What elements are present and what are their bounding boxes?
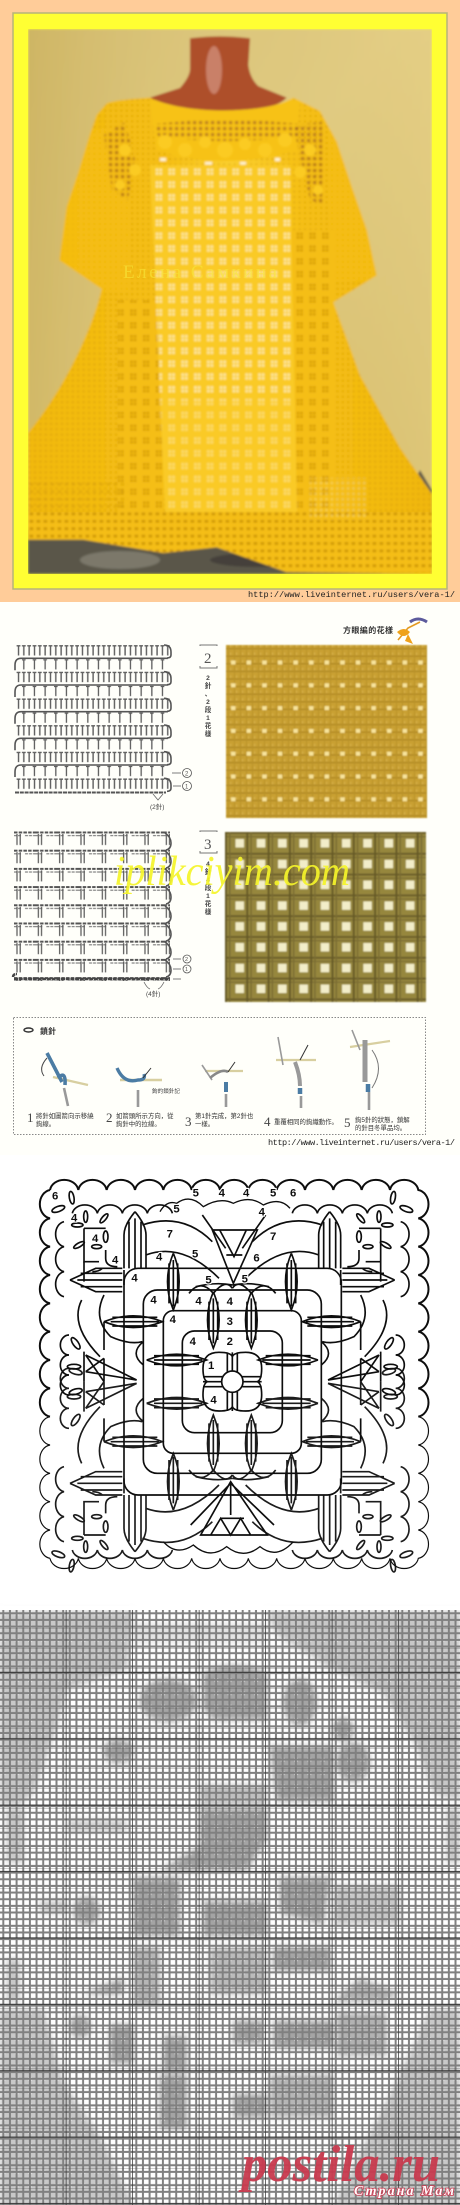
label: pattern number 2: 花 — [205, 721, 212, 730]
label: pattern number 3: 針 — [205, 867, 212, 876]
stitch count — [144, 982, 164, 998]
stitch count numbers: 2 — [227, 1336, 233, 1348]
swatch: pattern 2 — [226, 645, 427, 818]
step 4: 4 — [264, 1114, 271, 1129]
stitch count numbers: 4 — [190, 1336, 197, 1348]
stitch count numbers: 5 — [205, 1274, 212, 1286]
stitch count numbers: 5 — [173, 1203, 180, 1215]
heading with flower icon: 方眼編的花樣 — [343, 625, 393, 635]
stitch count numbers: 5 — [270, 1188, 276, 1200]
chart: pattern 2 symbols — [15, 645, 192, 811]
label: pattern number 2: 2 — [204, 651, 212, 667]
label: pattern number 3: 3 — [204, 837, 212, 853]
label: pattern number 3: 1 — [206, 893, 210, 900]
row markers: 1 — [185, 784, 189, 790]
bird and circle motif shading — [0, 1612, 460, 2205]
chart grid — [0, 1610, 460, 2205]
label: pattern number 3: 4 — [206, 877, 210, 884]
stitch count numbers: 4 — [112, 1254, 119, 1266]
row markers: 2 — [185, 772, 189, 778]
step 2: 鉤針中的拉線。 — [116, 1119, 161, 1128]
stitch count numbers: 4 — [219, 1188, 226, 1200]
stitch count numbers: 4 — [92, 1233, 99, 1245]
swatch: pattern 3 — [225, 832, 426, 1002]
panel: square motif crochet chart — [0, 1155, 460, 1610]
stitch count numbers: 4 — [210, 1394, 217, 1406]
stitch count numbers: 6 — [253, 1253, 260, 1265]
step 3: 3 — [185, 1114, 192, 1129]
step 3: 一樣。 — [195, 1119, 214, 1128]
step 5 — [344, 1030, 410, 1132]
stitch count numbers: 3 — [227, 1316, 233, 1328]
label: pattern number 2: 樣 — [205, 729, 212, 738]
label: pattern number 2: 2 — [206, 675, 210, 682]
watermark: name: Елена Самкина — [123, 262, 278, 283]
url label: http://www.liveinternet.ru/users/vera-1/ — [268, 1138, 455, 1148]
stitch count numbers: 1 — [208, 1360, 214, 1372]
stitch count: (2針) — [150, 802, 164, 811]
outer scalloped edge — [40, 1180, 429, 1569]
stitch count: (4針) — [146, 989, 160, 998]
panel: chain stitch tutorial — [14, 1018, 426, 1134]
stitch count numbers: 7 — [270, 1231, 276, 1243]
quadrants of the motif — [51, 1191, 414, 1572]
tutorial heading: 鎖針 — [40, 1026, 56, 1036]
stitch count numbers: 6 — [52, 1190, 58, 1202]
stitch count numbers: 7 — [167, 1228, 173, 1240]
stitch count numbers: 5 — [192, 1248, 198, 1260]
step 1: 1 — [27, 1110, 34, 1125]
step 1: 將針如圖箭向示移繞 — [36, 1111, 94, 1120]
label: pattern number 3 — [200, 831, 217, 916]
step 2: 鉤的鎖針記 — [152, 1087, 180, 1095]
panel: stitch patterns from the book page — [0, 602, 460, 1160]
label: pattern number 3: 樣 — [205, 907, 212, 916]
centre flower and rings — [84, 1262, 381, 1495]
step 4 — [264, 1037, 338, 1129]
top and bottom triangles — [191, 1215, 274, 1535]
stitch count numbers — [52, 1188, 296, 1406]
stitch count — [150, 794, 164, 811]
watermark: postila.ru: postila.ru — [238, 2136, 440, 2193]
label: pattern number 2: 段 — [205, 705, 212, 714]
lace yoke — [150, 100, 300, 161]
step 3 — [185, 1062, 254, 1129]
stitch count numbers: 4 — [259, 1207, 266, 1219]
label: pattern number 3: 4 — [206, 861, 210, 868]
step 2 — [106, 1068, 180, 1128]
mannequin neck — [150, 36, 287, 113]
stitch count numbers: 5 — [242, 1273, 248, 1285]
stitch count numbers: 4 — [195, 1296, 202, 1308]
stitch count numbers: 4 — [243, 1188, 250, 1200]
step 5: 鉤5針的狀態，鎖解 — [355, 1115, 410, 1124]
label: pattern number 2: 2 — [206, 699, 210, 706]
step 1: 鉤線。 — [36, 1119, 55, 1128]
photo — [28, 29, 432, 580]
panel: filet crochet bird chart — [0, 1606, 460, 2205]
label: pattern number 3: 花 — [205, 899, 212, 908]
step 2: 2 — [106, 1110, 112, 1125]
label: pattern number 2: 1 — [206, 715, 210, 722]
photo panel: yellow crochet dress — [0, 0, 460, 602]
stitch count numbers: 4 — [150, 1294, 157, 1306]
label: pattern number 2: 、 — [205, 691, 211, 698]
stitch count numbers: 4 — [170, 1314, 177, 1326]
stitch count numbers: 6 — [290, 1188, 296, 1200]
stitch count numbers: 4 — [131, 1272, 138, 1284]
step 3: 第1針完成，第2針也 — [195, 1111, 254, 1120]
row markers: 1 — [185, 967, 188, 973]
step 5: 5 — [344, 1115, 350, 1130]
tutorial heading — [24, 1026, 56, 1036]
step 4: 重覆相同的鉤織動作。 — [274, 1117, 338, 1126]
step 5: 的針目冬單品均。 — [355, 1123, 406, 1132]
heading with flower icon — [343, 619, 427, 644]
icon: flower sprig — [397, 619, 427, 644]
watermark: Страна Мам: Страна Мам — [354, 2184, 454, 2199]
label: pattern number 3: 段 — [205, 883, 212, 892]
stitch count numbers: 5 — [193, 1188, 199, 1200]
row markers: 2 — [185, 957, 188, 963]
row markers — [172, 768, 192, 790]
photo frame — [13, 13, 447, 589]
stitch count numbers: 4 — [227, 1296, 234, 1308]
url label: http://www.liveinternet.ru/users/vera-1/ — [248, 590, 455, 600]
stitch count numbers: 4 — [71, 1212, 78, 1224]
step 1 — [27, 1053, 94, 1128]
stitch count numbers: 4 — [156, 1252, 163, 1264]
watermark: iplikciyim.com: iplikciyim.com — [114, 849, 350, 895]
dress body — [28, 90, 432, 580]
step 2: 如箭頭所示方向，從 — [116, 1111, 174, 1120]
row markers — [173, 955, 191, 979]
label: pattern number 2: 針 — [205, 681, 212, 690]
chart: pattern 3 symbols — [13, 831, 191, 998]
label: pattern number 2 — [200, 645, 217, 738]
